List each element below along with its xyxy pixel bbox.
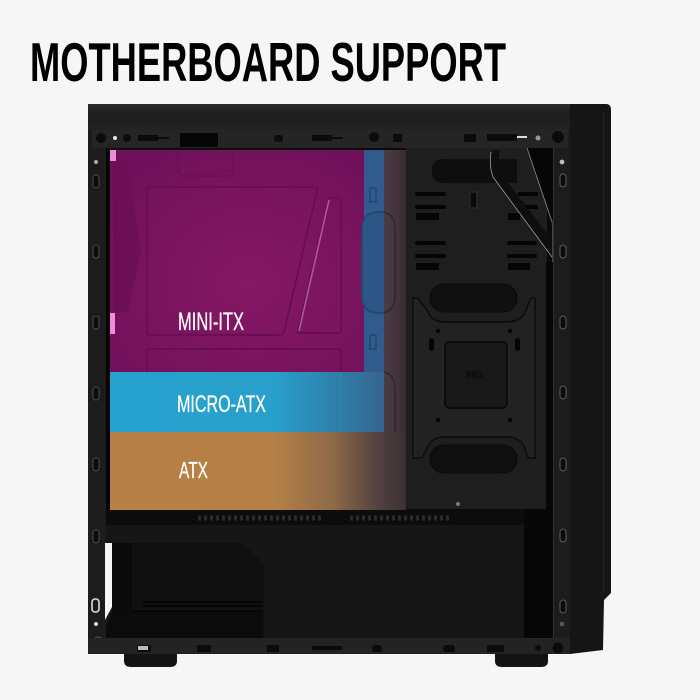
bottom rail holes [137,642,564,654]
raised plate [413,298,535,458]
interior [106,148,553,640]
black strip at left of board area [106,148,110,510]
mini-itx region [110,150,364,372]
top rail holes [96,131,564,143]
right vent slots [470,192,538,270]
case feet [124,654,548,667]
right frame [553,148,570,640]
vent pattern [198,516,450,520]
power supply shroud [106,525,524,638]
rear opening gap [105,543,112,620]
label: atx: ATX [179,457,208,483]
front panel [566,104,611,654]
atx region [110,432,406,510]
label: mini-itx: MINI-ITX [178,308,244,336]
cutouts [430,284,517,312]
right untinted strip of the board area [380,150,406,510]
gap above power supply shroud [106,510,547,525]
cables [491,150,552,257]
center square [445,342,507,408]
motherboard tray, right part: 880 [466,370,483,381]
tray screw holes [429,329,520,422]
embossed panel shapes [147,187,317,335]
shroud opening [106,543,264,638]
label: micro-atx: MICRO-ATX [177,391,266,418]
black corner behind the tray [527,148,553,222]
pink edge highlights [110,150,116,161]
case body frame [88,104,570,654]
top cutout [432,159,517,183]
top rail [88,104,570,130]
blue strip beside mini-itx [362,150,384,372]
left vent slots [415,192,446,270]
bottom rail [88,638,570,654]
left frame slots [93,175,99,543]
computer case [88,104,611,667]
left edge shading [113,161,141,312]
motherboard tray, right part [406,148,553,510]
micro-atx region [110,372,384,432]
